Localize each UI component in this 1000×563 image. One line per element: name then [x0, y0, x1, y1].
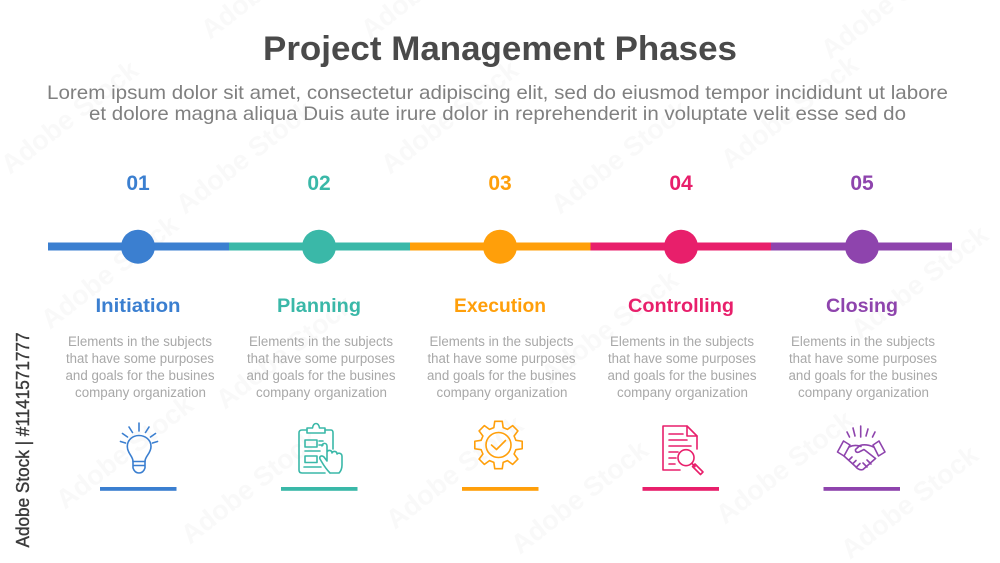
text: Adobe Stock: [35, 209, 185, 335]
icon: document with magnifier: [663, 426, 703, 474]
timeline bar: [48, 242, 952, 250]
text: Adobe Stock: [710, 404, 860, 530]
description 02: that have some purposes: [247, 351, 395, 366]
number 05: 05: [850, 172, 874, 195]
intro paragraph: [47, 82, 948, 125]
description 04: and goals for the busines: [608, 368, 757, 383]
text: Adobe Stock: [380, 409, 530, 535]
number 04: 04: [669, 172, 693, 195]
description 03: company organization: [436, 385, 568, 400]
description 01: and goals for the busines: [66, 368, 215, 383]
description 04: that have some purposes: [608, 351, 756, 366]
stock id vertical caption: Adobe Stock | #1141571777: [12, 332, 33, 548]
description 03: Elements in the subjects: [430, 334, 574, 349]
icon: clipboard with hand: [299, 424, 342, 473]
icon: light bulb: [120, 423, 158, 473]
timeline marker 05: [845, 230, 879, 264]
number 01: 01: [126, 172, 150, 195]
description 04: company organization: [617, 385, 748, 400]
number 03: 03: [488, 172, 512, 195]
description 01: [66, 334, 215, 400]
text: Adobe Stock: [375, 54, 525, 180]
description 02: and goals for the busines: [246, 368, 396, 383]
timeline marker 04: [664, 230, 698, 264]
description 05: [788, 334, 938, 400]
timeline marker 01: [121, 230, 155, 264]
number 02: 02: [307, 172, 331, 195]
description 02: company organization: [256, 385, 387, 400]
text: Adobe Stock: [845, 219, 995, 345]
description 03: that have some purposes: [428, 351, 576, 366]
icon: gear with check: [475, 421, 522, 469]
description 02: Elements in the subjects: [249, 334, 393, 349]
accent bar 04: [642, 487, 719, 491]
text: Adobe Stock: [175, 424, 325, 550]
description 01: that have some purposes: [66, 351, 214, 366]
description 05: and goals for the busines: [788, 368, 938, 383]
text: Adobe Stock: [835, 439, 985, 563]
text: Adobe Stock: [505, 434, 655, 560]
accent bar 01: [100, 487, 176, 491]
description 05: Elements in the subjects: [791, 334, 935, 349]
text: Adobe Stock: [170, 94, 320, 220]
text: Adobe Stock: [50, 389, 200, 515]
accent bar 03: [462, 487, 538, 491]
description 01: Elements in the subjects: [68, 334, 212, 349]
heading: controlling: Controlling: [628, 296, 734, 317]
description 01: company organization: [75, 385, 206, 400]
text: Adobe Stock: [715, 49, 865, 175]
panel: phase 01 initiation: [66, 172, 215, 491]
text: Adobe Stock: [210, 289, 360, 415]
description 04: Elements in the subjects: [610, 334, 754, 349]
heading: initiation: Initiation: [96, 296, 180, 317]
timeline marker 02: [302, 230, 336, 264]
description 02: [246, 334, 396, 400]
description 03: [427, 334, 576, 400]
icon: handshake: [838, 426, 885, 470]
accent bar 05: [824, 487, 900, 491]
intro paragraph: et dolore magna aliqua Duis aute irure dolor in reprehenderit in voluptate velit esse sed do: [89, 103, 906, 125]
panel: phase 03 execution: [427, 172, 576, 491]
timeline marker 03: [483, 230, 517, 264]
text: Adobe Stock: [535, 264, 685, 390]
panel: phase 02 planning: [246, 172, 396, 491]
panel: phase 05 closing: [788, 172, 938, 491]
description 04: [608, 334, 757, 400]
description 05: company organization: [798, 385, 929, 400]
heading: closing: Closing: [826, 296, 898, 317]
heading: planning: Planning: [277, 296, 361, 317]
text: Adobe Stock: [545, 94, 695, 220]
title: Project Management Phases: [263, 30, 737, 68]
panel: phase 04 controlling: [608, 172, 757, 491]
accent bar 02: [281, 487, 358, 491]
heading: execution: Execution: [454, 296, 546, 317]
description 05: that have some purposes: [789, 351, 937, 366]
intro paragraph: Lorem ipsum dolor sit amet, consectetur adipiscing elit, sed do eiusmod tempor incididunt ut labore: [47, 82, 948, 104]
description 03: and goals for the busines: [427, 368, 576, 383]
